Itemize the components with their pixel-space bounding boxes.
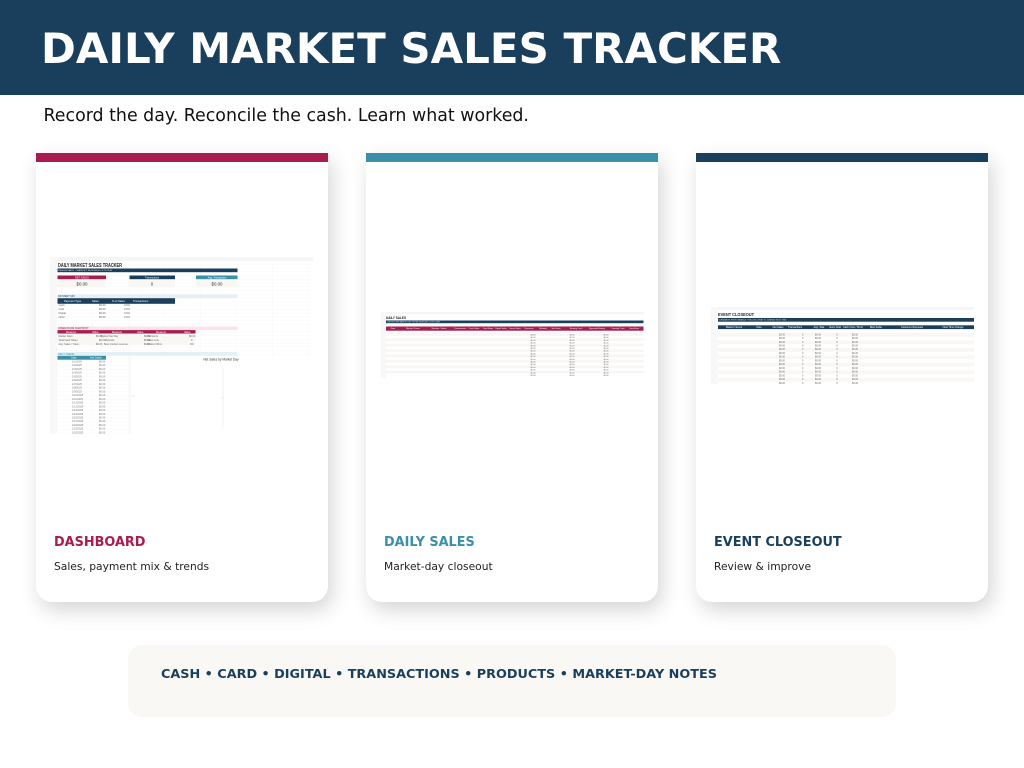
subtitle: Record the day. Reconcile the cash. Learn what worked. [44,106,529,126]
operations snapshot table: Value [137,330,144,334]
sheet rows: $0.00 [815,356,822,359]
sheet header row: Best Seller [870,326,882,329]
operations snapshot table: $0.00 [144,339,151,342]
sheet rows: $0.00 [852,352,859,355]
sheet header row: Net Sales [773,326,784,329]
sheet rows: $0.00 [569,340,575,342]
payment mix table: 0.0% [124,311,131,315]
sheet rows: $0.00 [852,367,859,370]
sheet rows: $0.00 [779,382,786,385]
daily trend table: $0.00 [99,402,106,405]
sheet rows: $0.00 [779,352,786,355]
sheet rows: $0.00 [603,345,609,347]
KPI cards: $0.00 [76,281,88,286]
daily trend table: $0.00 [99,398,106,401]
sheet rows: 0 [836,337,838,340]
sheet header row: Date [756,326,762,329]
sheet rows: $0.00 [779,363,786,366]
daily trend table: 1/2/2025 [72,364,82,367]
sheet rows: $0.00 [852,337,859,340]
sheet rows: $0.00 [530,353,536,355]
daily trend table: $0.00 [99,387,106,390]
sheet title: DAILY SALES [386,315,406,320]
operations snapshot table: Sales Lost [147,339,159,342]
payment mix table: $0.00 [99,307,106,311]
sheet rows: 0 [836,344,838,348]
sheet rows: 0 [802,337,804,340]
screenshot: event closeout sheet [711,307,974,385]
sheet rows: $0.00 [852,363,859,366]
daily trend table [58,352,238,434]
operations snapshot table: Value [92,330,99,334]
sheet rows: $0.00 [530,351,536,353]
operations snapshot table: Best product revenue [104,343,128,346]
sheet rows: $0.00 [779,333,786,336]
footer text: CASH • CARD • DIGITAL • TRANSACTIONS • PRODUCTS • MARKET-DAY NOTES [161,667,717,682]
sheet rows: $0.00 [852,356,859,359]
operations snapshot table: $0.00 [96,343,103,346]
sheet rows: 0 [836,352,838,355]
payment mix table: Cash [58,303,65,307]
sheet header row: Market / Event [406,327,420,330]
sheet header row: Avg. Sale [814,326,825,329]
description: dashboard: Sales, payment mix & trends [54,560,209,573]
daily trend table: 1/4/2025 [72,372,82,375]
sheet rows: $0.00 [779,371,786,374]
daily trend table: $0.00 [99,360,106,364]
daily trend table: $0.00 [99,394,106,397]
sheet rows: 0 [836,348,838,351]
sheet rows: $0.00 [530,340,536,342]
daily trend table: $0.00 [99,424,106,427]
sheet title: EVENT CLOSEOUT [718,312,754,318]
sheet rows: $0.00 [779,344,786,348]
sheet header row: Next Time Change [943,326,964,329]
daily trend table: $0.00 [99,416,106,420]
sheet rows: $0.00 [815,382,822,385]
sheet rows: $0.00 [815,367,822,370]
daily trend table: 1/20/2025 [72,431,84,434]
operations snapshot table: Total Cash Taken [58,339,78,342]
sheet rows: $0.00 [603,364,609,366]
heading: dashboard: DASHBOARD [54,535,145,550]
daily trend table: 1/12/2025 [72,402,84,405]
operations snapshot table: $0.00 [189,335,196,338]
sheet rows: $0.00 [569,337,575,339]
sheet rows: 0 [802,382,804,385]
sheet rows: 0 [802,333,804,336]
panel: daily sales [366,153,658,602]
sheet rows: $0.00 [852,378,859,381]
payment mix table: Payment Type [64,299,82,303]
daily trend table: $0.00 [99,364,106,367]
sheet rows: $0.00 [779,378,786,381]
sheet rows: $0.00 [779,360,786,362]
daily trend table: Date [71,356,77,360]
sheet rows: $0.00 [603,337,609,339]
sheet rows: $0.00 [852,371,859,374]
sheet rows: $0.00 [569,334,575,336]
payment mix table: Digital [58,311,66,315]
sheet rows: 0 [802,352,804,355]
sheet rows: 0 [836,360,838,362]
sheet rows: 0 [802,356,804,359]
sheet rows: $0.00 [530,343,536,345]
panel: event closeout [696,153,988,602]
chart: net sales by market day [130,357,313,434]
payment mix table: Transactions [133,299,149,303]
sheet rows: $0.00 [603,359,609,361]
sheet rows: $0.00 [779,337,786,340]
operations snapshot table: 0% [190,343,194,346]
sheet rows: $0.00 [530,348,536,350]
daily trend table: $0.00 [99,368,106,371]
operations snapshot table: OPERATIONS SNAPSHOT [58,327,89,330]
daily trend table: $0.00 [99,375,106,378]
sheet header row: Customer Requests [901,326,924,329]
header banner [0,0,1024,95]
daily trend table: 1/8/2025 [72,387,82,390]
sheet rows: 0 [836,341,838,344]
screenshot: daily sales sheet [381,312,644,378]
screenshot: dashboard sheet: DASHBOARD • MARKET BUSINESS SYSTEM [58,269,112,272]
daily trend table: $0.00 [99,405,106,408]
sheet rows: $0.00 [779,374,786,378]
sheet rows: $0.00 [779,348,786,351]
sheet header row [386,326,644,331]
daily trend table: 1/7/2025 [72,383,82,386]
sheet header row: Transactions [454,327,466,330]
sheet rows: 0 [802,378,804,381]
sheet rows: $0.00 [852,348,859,351]
operations snapshot table: Avg. Sales / Trans. [58,343,80,346]
screenshot: event closeout sheet: SUMMARIZE PERFORMANCE • RECORD WHAT TO CHANGE NEXT TIME [718,318,787,322]
daily trend table: $0.00 [99,379,106,382]
sheet rows: $0.00 [815,352,822,355]
daily trend table: $0.00 [99,372,106,375]
sheet header row: Items Sold [829,326,842,329]
sheet title: DAILY MARKET SALES TRACKER [58,263,122,269]
daily trend table: 1/17/2025 [72,420,84,423]
daily trend table: $0.00 [99,383,106,386]
description: event closeout: Review & improve [714,560,811,573]
daily trend table: 1/14/2025 [72,409,84,412]
sheet rows: $0.00 [530,367,536,369]
sheet header row: Counted Cash [611,327,625,330]
sheet rows: $0.00 [530,356,536,358]
sheet rows: $0.00 [603,356,609,358]
sheet header row: Date [391,327,396,330]
sheet rows: $0.00 [815,341,822,344]
KPI cards: 0 [151,281,154,286]
daily trend table: 1/11/2025 [72,398,84,401]
sheet rows: $0.00 [815,333,822,336]
sheet rows: $0.00 [569,348,575,350]
operations snapshot table: Measure [156,330,167,334]
panel: dashboard [36,153,328,602]
sheet header row: Card Sales [483,327,493,330]
sheet rows: $0.00 [779,367,786,370]
daily trend table: 1/10/2025 [72,394,84,397]
sheet rows: $0.00 [603,372,609,374]
daily trend table: 1/3/2025 [72,368,82,371]
sheet rows: $0.00 [815,360,822,362]
daily trend table: $0.00 [99,420,106,423]
sheet rows: $0.00 [569,367,575,369]
sheet rows: $0.00 [815,371,822,374]
sheet rows: $0.00 [530,334,536,336]
sheet rows: $0.00 [603,362,609,364]
sheet rows: $0.00 [530,362,536,364]
sheet rows: $0.00 [603,334,609,336]
sheet header row: Over/Short [629,327,639,330]
sheet rows: $0.00 [603,367,609,369]
sheet rows: $0.00 [603,353,609,355]
sheet rows: $0.00 [779,356,786,359]
sheet rows: $0.00 [569,353,575,355]
sheet rows: 0 [836,367,838,370]
operations snapshot table: Refunds [105,339,115,342]
sheet rows: 0 [836,378,838,381]
daily trend table: 1/5/2025 [72,375,82,378]
heading: event closeout: EVENT CLOSEOUT [714,535,842,550]
payment mix table: $0.00 [99,315,106,319]
payment mix table: Card [58,307,65,311]
daily trend table: 1/1/2025 [72,360,82,364]
sheet header row: Discounts [524,327,534,330]
operations snapshot table: Highest Net Day [100,335,119,338]
chart: net sales by market day: Net Sales by Market Day [203,358,239,362]
sheet header row: Gross Sales [509,327,521,330]
sheet rows: 0 [836,363,838,366]
operations snapshot table: Product Wins [147,343,163,346]
sheet rows: $0.00 [603,351,609,353]
sheet rows: $0.00 [603,370,609,372]
daily trend table: 1/9/2025 [72,390,82,393]
sheet rows: 0 [802,341,804,344]
sheet rows: $0.00 [569,362,575,364]
sheet rows: $0.00 [815,374,822,378]
sheet rows: $0.00 [815,378,822,381]
sheet header row: Market / Event [726,326,742,329]
KPI cards: NET SALES [75,276,89,279]
operations snapshot table: Discounts [147,335,159,338]
daily trend table: 1/16/2025 [72,416,84,420]
sheet rows: $0.00 [852,341,859,344]
sheet rows: $0.00 [815,337,822,340]
description: daily sales: Market-day closeout [384,560,493,573]
sheet rows: $0.00 [569,356,575,358]
KPI cards: $0.00 [212,281,223,286]
sheet rows: $0.00 [852,333,859,336]
sheet rows: 0 [802,363,804,366]
operations snapshot table: Measure [112,330,123,334]
sheet header row: Expected Ending [589,327,606,330]
sheet rows: 0 [836,356,838,359]
daily trend table: Net Sales [90,356,102,360]
sheet rows: 0 [802,348,804,351]
accent bar: daily sales [366,153,658,162]
sheet rows: $0.00 [815,344,822,348]
daily trend table: DAILY TREND [58,353,74,356]
sheet header row: Cash Sales [469,328,479,330]
sheet rows: $0.00 [603,340,609,342]
screenshot: dashboard sheet [50,257,313,434]
payment mix table: % of Sales [112,299,126,303]
sheet rows: $0.00 [852,382,859,385]
daily trend table: $0.00 [99,413,106,416]
sheet rows: $0.00 [815,348,822,351]
payment mix table [58,294,238,319]
sheet rows: 0 [802,344,804,348]
sheet rows: $0.00 [569,370,575,372]
sheet rows: $0.00 [603,343,609,345]
sheet rows: $0.00 [569,372,575,374]
sheet rows [386,333,644,377]
daily trend table: $0.00 [99,409,106,412]
sheet header row: Transactions [788,326,803,329]
sheet rows: $0.00 [530,345,536,347]
daily trend table: 1/19/2025 [72,428,84,431]
screenshot: daily sales sheet: ONE ROW PER MARKET DAY • ENTER SALES AND COUNT CASH [387,320,441,323]
sheet rows: 0 [802,360,804,362]
sheet rows: 0 [836,382,838,385]
sheet rows: $0.00 [815,363,822,366]
sheet rows: 0 [836,333,838,336]
footer strip [128,645,896,717]
sheet rows: 0 [836,371,838,374]
daily trend table: 1/18/2025 [72,424,84,427]
daily trend table: $0.00 [99,431,106,434]
daily trend table: 1/15/2025 [72,413,84,416]
sheet rows: $0.00 [569,359,575,361]
sheet rows: $0.00 [569,364,575,366]
payment mix table: PAYMENT MIX [58,295,75,298]
operations snapshot table: $0.00 [144,343,151,346]
sheet rows: $0.00 [569,375,575,377]
operations snapshot table: Value [184,330,191,334]
sheet rows: 0 [802,371,804,374]
sheet rows: 0 [836,374,838,378]
sheet rows: 0 [802,374,804,378]
sheet rows: $0.00 [852,374,859,378]
payment mix table: 0.0% [124,307,131,311]
sheet rows: $0.00 [569,343,575,345]
operations snapshot table: $0.00 [99,339,106,342]
KPI cards [58,276,238,287]
heading: daily sales: DAILY SALES [384,535,475,550]
operations snapshot table: 0 [191,339,193,342]
sheet rows: $0.00 [530,375,536,377]
sheet rows: $0.00 [852,360,859,362]
sheet header row [718,325,974,329]
operations snapshot table: $0.00 [144,335,151,338]
sheet header row: Weather / Notes [432,327,446,330]
sheet rows: $0.00 [852,344,859,348]
payment mix table: Sales [92,299,99,303]
sheet rows: $0.00 [530,370,536,372]
daily trend table: 1/6/2025 [72,379,82,382]
daily trend table: 1/13/2025 [72,405,84,408]
title: DAILY MARKET SALES TRACKER [41,24,781,73]
sheet header row: Net Sales [551,327,561,330]
operations snapshot table [58,326,238,346]
payment mix table: 0.0% [124,303,131,307]
sheet rows: $0.00 [569,345,575,347]
payment mix table: $0.00 [99,303,106,307]
accent bar: event closeout [696,153,988,162]
sheet rows: $0.00 [603,348,609,350]
sheet rows: 0 [802,367,804,370]
sheet rows: $0.00 [530,359,536,361]
operations snapshot table: Measure [66,330,77,334]
payment mix table: 0.0% [124,315,131,319]
sheet header row: Refunds [539,328,547,330]
sheet header row: Cash Over / Short [843,326,863,329]
payment mix table: Other [58,315,65,319]
operations snapshot table: $0.00 [96,335,103,338]
daily trend table: $0.00 [99,428,106,431]
sheet rows: $0.00 [603,375,609,377]
sheet rows: $0.00 [530,337,536,339]
sheet rows: $0.00 [569,351,575,353]
sheet header row: Digital Sales [495,327,507,330]
KPI cards: Avg. Transaction [208,276,227,279]
accent bar: dashboard [36,153,328,162]
payment mix table: $0.00 [99,311,106,315]
sheet rows: $0.00 [530,364,536,366]
sheet rows: $0.00 [530,372,536,374]
operations snapshot table: Market Days [58,335,73,338]
sheet rows [718,333,974,385]
sheet header row: Starting Cash [570,327,583,330]
sheet rows: $0.00 [779,341,786,344]
KPI cards: Transactions [145,276,160,279]
daily trend table: $0.00 [99,390,106,393]
